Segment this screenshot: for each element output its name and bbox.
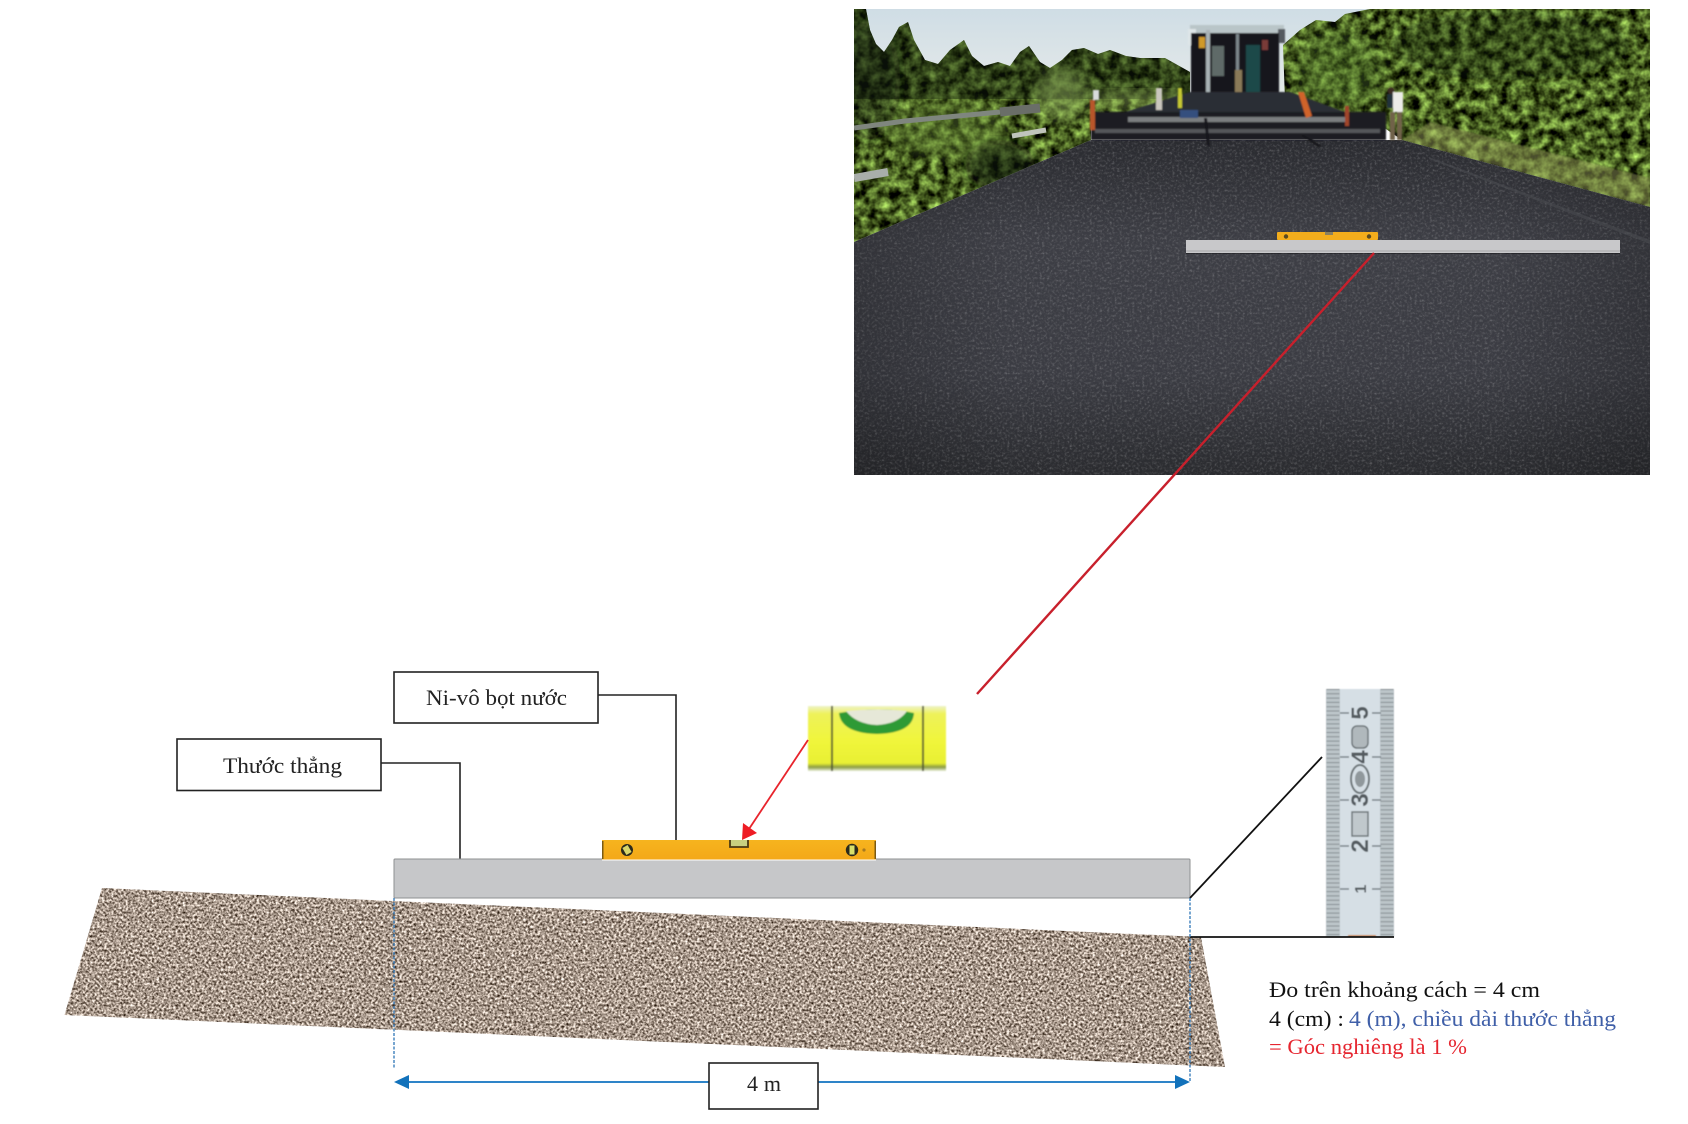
spirit level tool <box>602 840 876 860</box>
asphalt road surface <box>854 140 1650 475</box>
explanation text: 4 (m), chiều dài thước thẳng <box>1349 1006 1616 1031</box>
explanation text: 4 (cm) : <box>1269 1006 1344 1031</box>
sloped stone pavement layer <box>60 885 1230 1071</box>
measuring tape close-up: 4 <box>1347 750 1374 764</box>
paver machine <box>1090 25 1386 147</box>
straightedge on road <box>1186 240 1620 254</box>
leader line: straightedge label to straightedge <box>381 763 460 859</box>
explanation text <box>1269 977 1616 1059</box>
measuring tape close-up: 2 <box>1347 839 1374 853</box>
worker in white shirt <box>1387 88 1403 140</box>
label box: 4 m: 4 m <box>747 1071 781 1096</box>
vegetation right of road <box>1280 9 1652 209</box>
label box: Ni-vô bọt nước: Ni-vô bọt nước <box>426 685 567 710</box>
photo: freshly paved road with paver machine <box>840 9 1652 475</box>
guardrails <box>854 108 1046 178</box>
long red leader line from photo to diagram <box>977 253 1374 694</box>
measuring tape close-up: 1 <box>1353 884 1370 893</box>
label box: 4 m <box>709 1063 818 1109</box>
leader line: level label to level <box>598 695 676 841</box>
explanation text: Đo trên khoảng cách = 4 cm <box>1269 977 1540 1002</box>
label box: Thước thẳng: Thước thẳng <box>223 753 342 778</box>
screed body <box>1125 92 1345 112</box>
measuring tape close-up <box>1326 689 1394 937</box>
label box: Ni-vô bọt nước <box>394 672 598 723</box>
zoom lines to measuring tape <box>1190 757 1394 937</box>
sky <box>866 9 1370 92</box>
red arrow from vial to level <box>742 740 808 840</box>
straightedge bar <box>394 859 1190 898</box>
label box: Thước thẳng <box>177 739 381 790</box>
dimension arrow: 4 m span <box>394 1075 1190 1089</box>
spirit level on road <box>1277 232 1378 240</box>
measuring tape close-up: 5 <box>1347 706 1374 720</box>
bubble vial close-up <box>808 706 946 771</box>
explanation text: = Góc nghiêng là 1 % <box>1269 1034 1467 1059</box>
vegetation left of road <box>840 9 1194 249</box>
measuring tape close-up: 3 <box>1347 793 1374 807</box>
cab <box>1190 25 1284 33</box>
dotted vertical extents <box>394 898 1190 1082</box>
